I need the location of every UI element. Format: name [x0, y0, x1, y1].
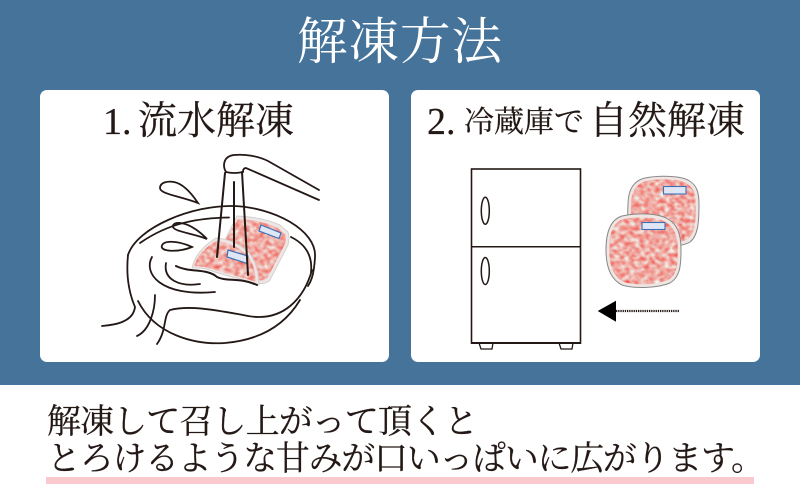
heading: method 2: 2. [427, 101, 456, 143]
pack label [259, 225, 281, 238]
heading: method 1: 1. [103, 101, 132, 143]
front pack [606, 214, 681, 287]
heading: method 2: 自然解凍 [589, 100, 745, 143]
water splash drops [160, 182, 207, 251]
closing message line 2: とろけるような甘みが口いっぱいに広がります。 [47, 441, 764, 478]
blue background [0, 0, 800, 385]
illustration: bowl under faucet [102, 155, 319, 344]
arrow pointing to refrigerator [598, 301, 679, 322]
pink underline [46, 477, 754, 484]
closing message line 1: 解凍して召し上がって頂くと [47, 404, 477, 441]
title: 解凍方法 [297, 14, 503, 70]
rear pack [628, 176, 699, 247]
water streams [217, 172, 248, 275]
water ripples [150, 257, 215, 293]
handles [481, 197, 489, 224]
bowl rim [128, 206, 315, 286]
pack label [642, 222, 665, 230]
heading: method 2: 冷蔵庫で [464, 106, 584, 139]
faucet [224, 155, 319, 200]
bowl and water lines [102, 155, 319, 344]
front shrimp pack [192, 238, 259, 285]
rear shrimp pack [225, 216, 289, 284]
bowl body [102, 255, 135, 326]
feet [479, 343, 493, 349]
illustration: refrigerator [471, 169, 581, 349]
panel: running water thawing [40, 90, 389, 362]
panel: refrigerator natural thawing [411, 90, 760, 362]
heading: method 1: 流水解凍 [138, 100, 294, 143]
heading: method 2 [427, 100, 745, 143]
pack label [664, 186, 686, 194]
pack label [227, 250, 248, 264]
shrimp packs [606, 176, 699, 287]
